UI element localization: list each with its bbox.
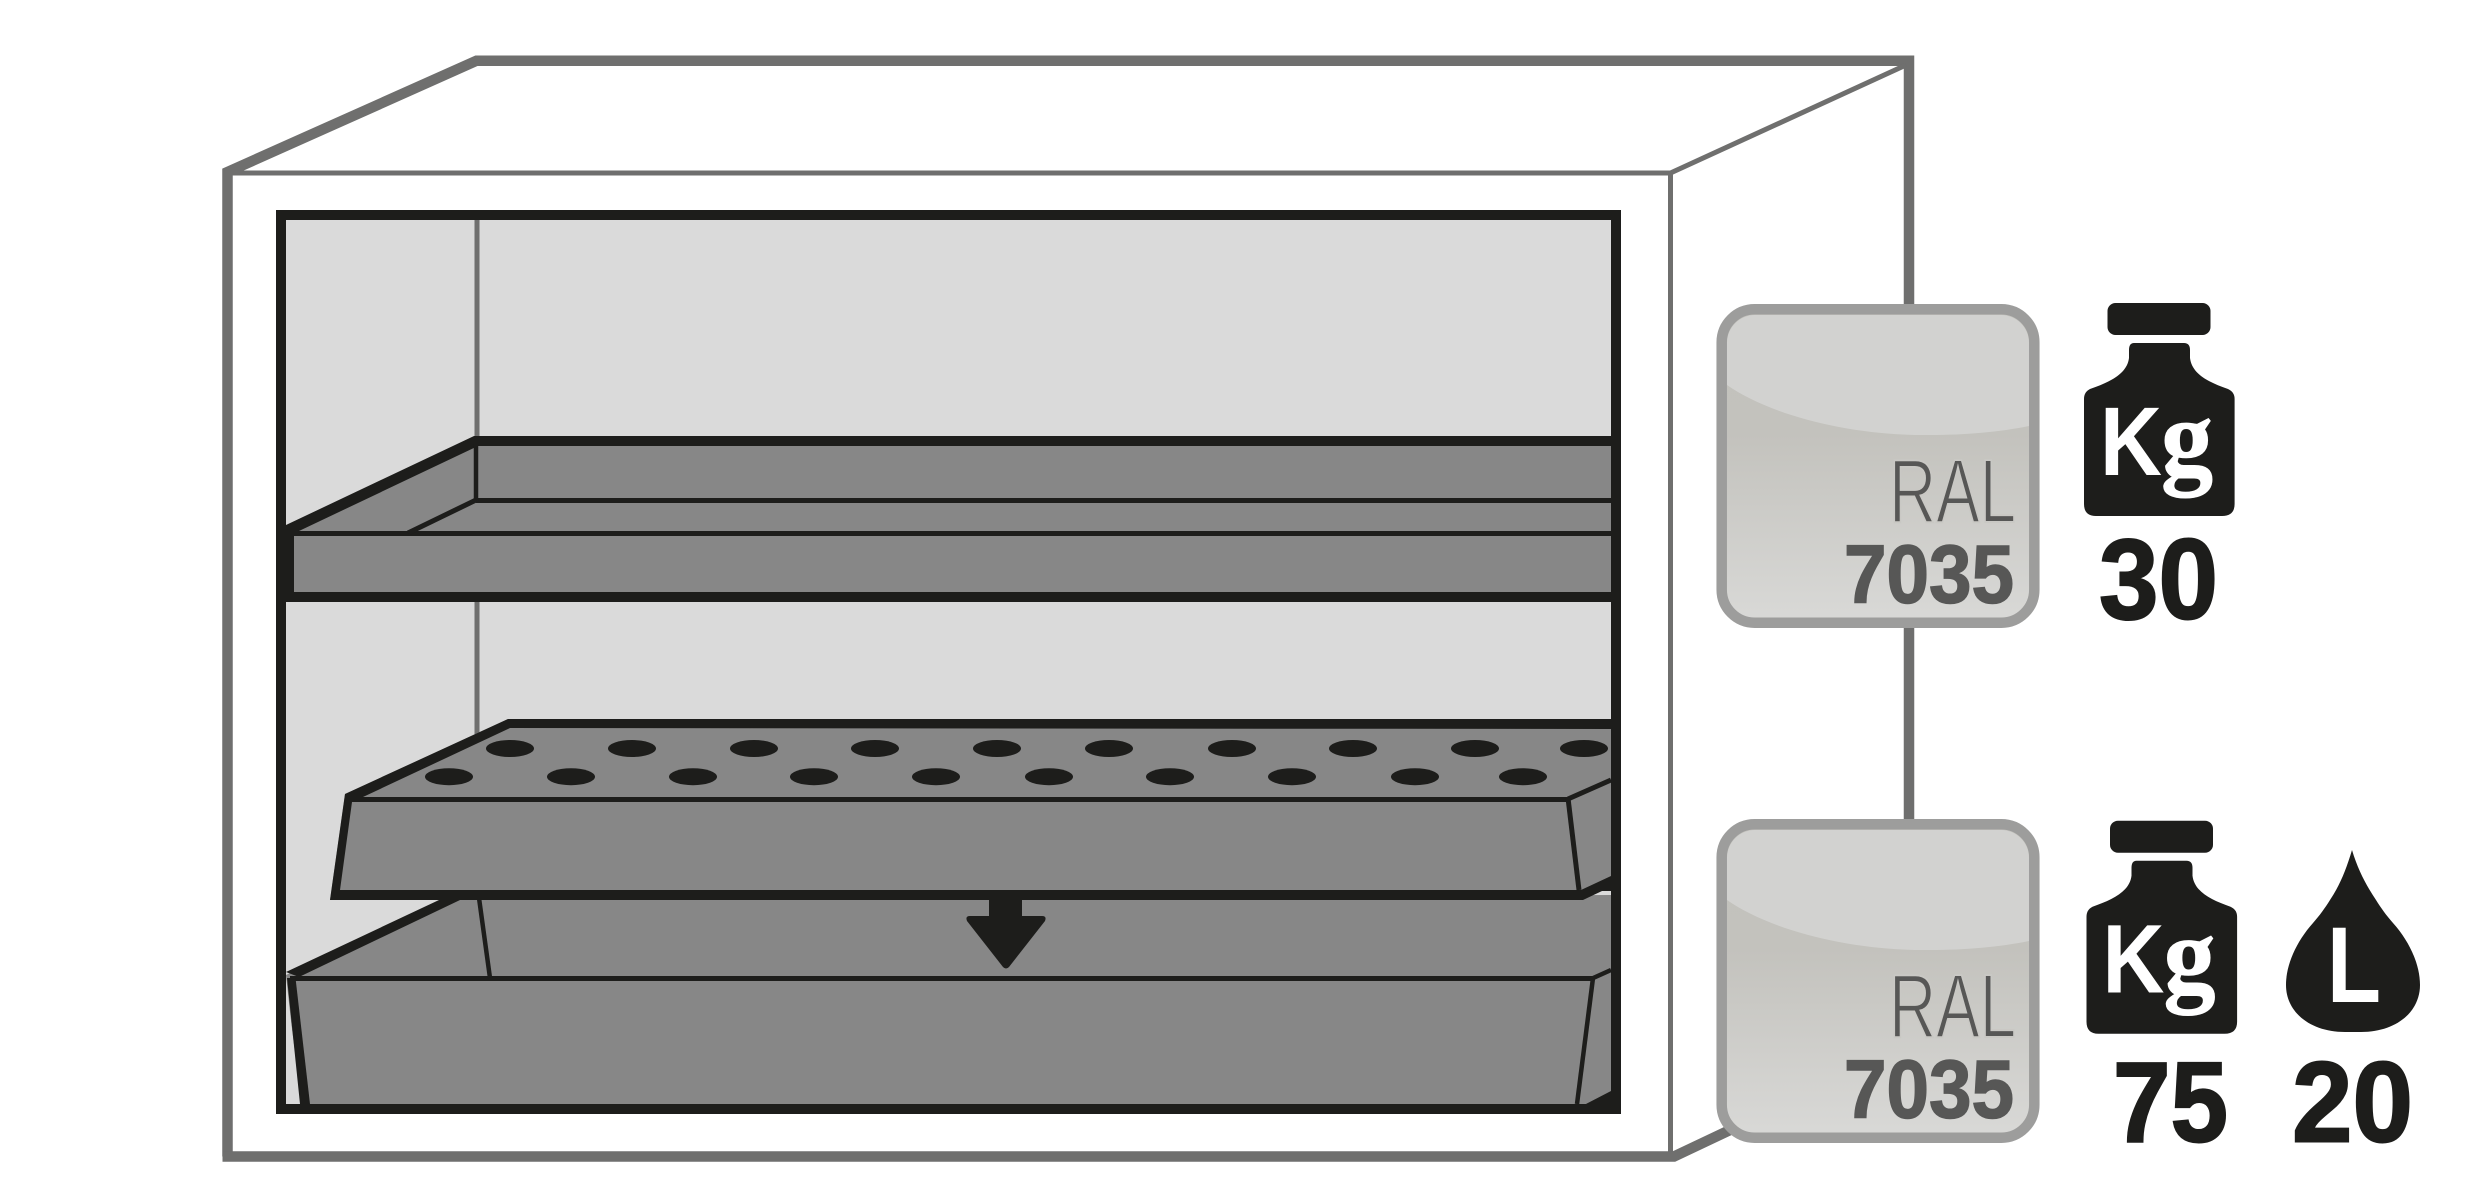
colour swatch: upper RAL 7035: RAL [1889, 442, 2016, 542]
colour swatch: upper RAL 7035 [1722, 309, 2034, 623]
colour swatch: lower RAL 7035: RAL [1889, 957, 2016, 1057]
icon: 20 litre drop: L [2327, 904, 2381, 1025]
icon: 30 kg weight: K [2100, 387, 2162, 496]
lower sump tray [286, 895, 1611, 1105]
icon: 20 litre drop [2286, 850, 2420, 1032]
icon: 75 kg weight [2086, 821, 2237, 1034]
icon: 75 kg weight: K [2102, 905, 2164, 1014]
icon: 30 kg weight: g [2161, 379, 2213, 498]
perforation holes [425, 740, 1608, 785]
icon: down arrow [966, 898, 1046, 968]
door opening with interior [281, 215, 1616, 1109]
value: 30: 30 [2099, 516, 2218, 644]
icon: 75 kg weight: g [2164, 897, 2216, 1016]
icon: 30 kg weight [2084, 303, 2235, 516]
colour swatch: lower RAL 7035 [1722, 824, 2034, 1138]
perforated insert tray [330, 719, 1611, 900]
value: 20: 20 [2292, 1040, 2413, 1166]
cabinet outline [222, 61, 1909, 1157]
colour swatch: upper RAL 7035: 7035 [1844, 528, 2014, 620]
value: 75: 75 [2113, 1040, 2228, 1166]
colour swatch: lower RAL 7035: 7035 [1844, 1042, 2014, 1136]
upper shelf [286, 436, 1611, 602]
